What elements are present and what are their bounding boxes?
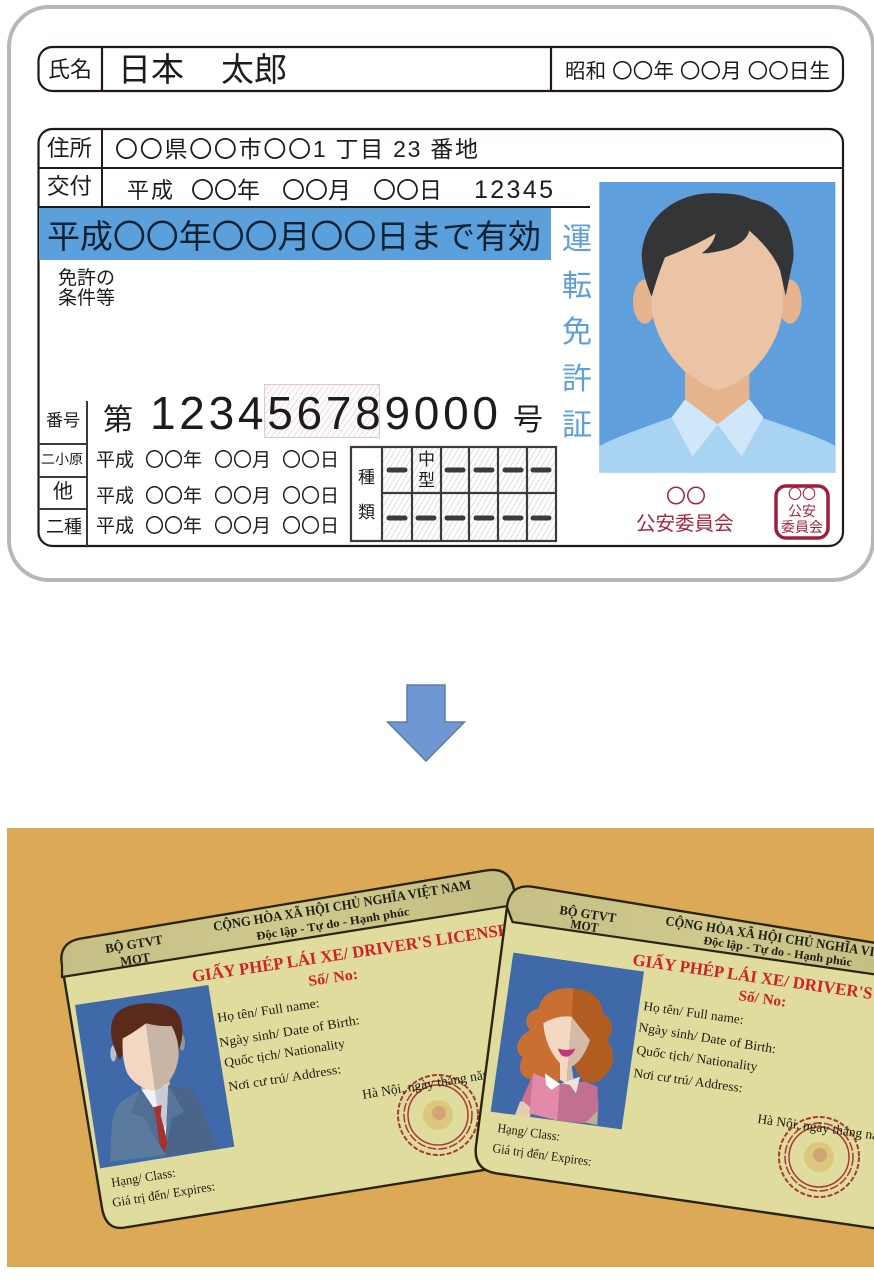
panel: Vietnamese license, man <box>61 870 560 1228</box>
left category column <box>38 401 87 546</box>
license title: Số/ No: <box>307 967 359 990</box>
issue date row: 12345 <box>474 176 553 204</box>
validity band: 平成〇〇年〇〇月〇〇日まで有効 <box>47 218 541 255</box>
place and date: Hà Nội, ngày tháng năm <box>361 1066 495 1102</box>
license class grid <box>351 447 556 541</box>
vertical title: 運 <box>562 223 592 256</box>
photo: man <box>599 182 835 473</box>
field labels: Hạng/ Class: <box>110 1165 177 1190</box>
license title: Số/ No: <box>737 988 787 1011</box>
date rows: 〇〇月 <box>214 515 271 537</box>
date rows: 〇〇年 <box>145 515 202 537</box>
conditions label: 免許の <box>58 267 115 289</box>
field labels: Giá trị đến/ Expires: <box>111 1178 216 1210</box>
issue date row: 〇〇日 <box>373 177 442 203</box>
license number: 番号 <box>46 411 80 430</box>
header band: BỘ GTVT <box>559 902 617 925</box>
field labels: Họ tên/ Full name: <box>216 995 320 1025</box>
date rows: 〇〇日 <box>282 485 339 507</box>
header band: Độc lập - Tự do - Hạnh phúc <box>256 906 410 943</box>
issuer name: 〇〇 <box>666 485 706 508</box>
date rows: 〇〇年 <box>145 485 202 507</box>
name row: 氏名 <box>48 57 92 82</box>
date rows: 平成 <box>96 515 134 537</box>
date rows: 〇〇日 <box>282 449 339 471</box>
field labels: Nơi cư trú/ Address: <box>633 1065 744 1095</box>
date rows: 〇〇日 <box>282 515 339 537</box>
field labels <box>492 998 777 1169</box>
license title: GIẤY PHÉP LÁI XE/ DRIVER'S LICENSE <box>191 920 510 986</box>
issue date row: 〇〇月 <box>282 177 351 203</box>
field labels <box>110 995 361 1210</box>
seal <box>398 1075 478 1155</box>
license class grid: 中 <box>418 450 435 469</box>
conditions label <box>58 267 115 309</box>
photo: woman <box>491 953 644 1129</box>
vertical title: 許 <box>562 363 592 396</box>
address row: 〇〇県〇〇市〇〇1 丁目 23 番地 <box>115 136 478 162</box>
header band: MOT <box>570 916 600 935</box>
issue date row: 交付 <box>47 174 92 199</box>
date rows: 〇〇年 <box>145 449 202 471</box>
panel: tan background <box>7 828 874 1267</box>
license number: 第 <box>103 404 133 437</box>
license number: 123456789000 <box>150 387 498 439</box>
issuer name: 公安委員会 <box>636 513 734 535</box>
name row: 昭和 〇〇年 〇〇月 〇〇日生 <box>565 60 830 83</box>
field labels: Nơi cư trú/ Address: <box>227 1061 342 1094</box>
conditions label: 条件等 <box>58 287 115 309</box>
address row: 住所 <box>47 136 92 161</box>
arrow: down <box>388 685 464 761</box>
official stamp: 〇〇 <box>788 486 816 502</box>
field labels: Quốc tịch/ Nationality <box>636 1042 759 1074</box>
left category column: 他 <box>53 480 73 503</box>
issue date row: 平成 <box>127 178 173 203</box>
field labels: Quốc tịch/ Nationality <box>223 1035 346 1070</box>
name row: 太郎 <box>221 51 287 88</box>
official stamp <box>776 486 828 538</box>
main license frame <box>38 129 843 546</box>
header band: CỘNG HÒA XÃ HỘI CHỦ NGHĨA VIỆT NAM <box>212 877 472 934</box>
date rows: 〇〇月 <box>214 449 271 471</box>
vertical title: 転 <box>562 270 592 303</box>
field labels: Ngày sinh/ Date of Birth: <box>638 1019 777 1056</box>
official stamp: 委員会 <box>781 519 823 535</box>
official stamp: 公安 <box>788 503 816 519</box>
name row: 日本 <box>118 51 184 88</box>
license class grid: 類 <box>358 503 375 522</box>
vertical title: 免 <box>562 316 592 349</box>
license class grid: 種 <box>358 468 375 487</box>
date rows: 平成 <box>96 449 134 471</box>
license number <box>46 384 543 439</box>
license number: 号 <box>513 404 543 437</box>
header band: MOT <box>119 949 151 969</box>
left category column: 二種 <box>46 517 82 537</box>
panel: Japanese driver's license <box>9 7 873 580</box>
license class grid: 型 <box>418 471 435 490</box>
issue date row <box>47 174 553 204</box>
left category column: 二小原 <box>41 452 83 467</box>
field labels: Họ tên/ Full name: <box>643 998 745 1027</box>
field labels: Ngày sinh/ Date of Birth: <box>218 1012 361 1050</box>
issuer name <box>636 485 734 535</box>
header band: Độc lập - Tự do - Hạnh phúc <box>703 935 853 969</box>
validity band <box>39 208 551 260</box>
header band <box>507 886 874 978</box>
photo: man in suit <box>75 985 234 1168</box>
issue date row: 〇〇年 <box>191 177 260 203</box>
date rows: 〇〇月 <box>214 485 271 507</box>
date rows: 平成 <box>96 485 134 507</box>
date rows <box>96 449 339 537</box>
field labels: Giá trị đến/ Expires: <box>492 1140 593 1169</box>
vertical title <box>562 223 592 442</box>
header band <box>61 870 514 977</box>
name row <box>38 47 843 91</box>
header band: BỘ GTVT <box>104 932 164 956</box>
vertical title: 証 <box>562 409 592 442</box>
seal <box>779 1117 859 1197</box>
field labels: Hạng/ Class: <box>497 1120 561 1144</box>
panel: Vietnamese license, woman <box>476 886 874 1232</box>
